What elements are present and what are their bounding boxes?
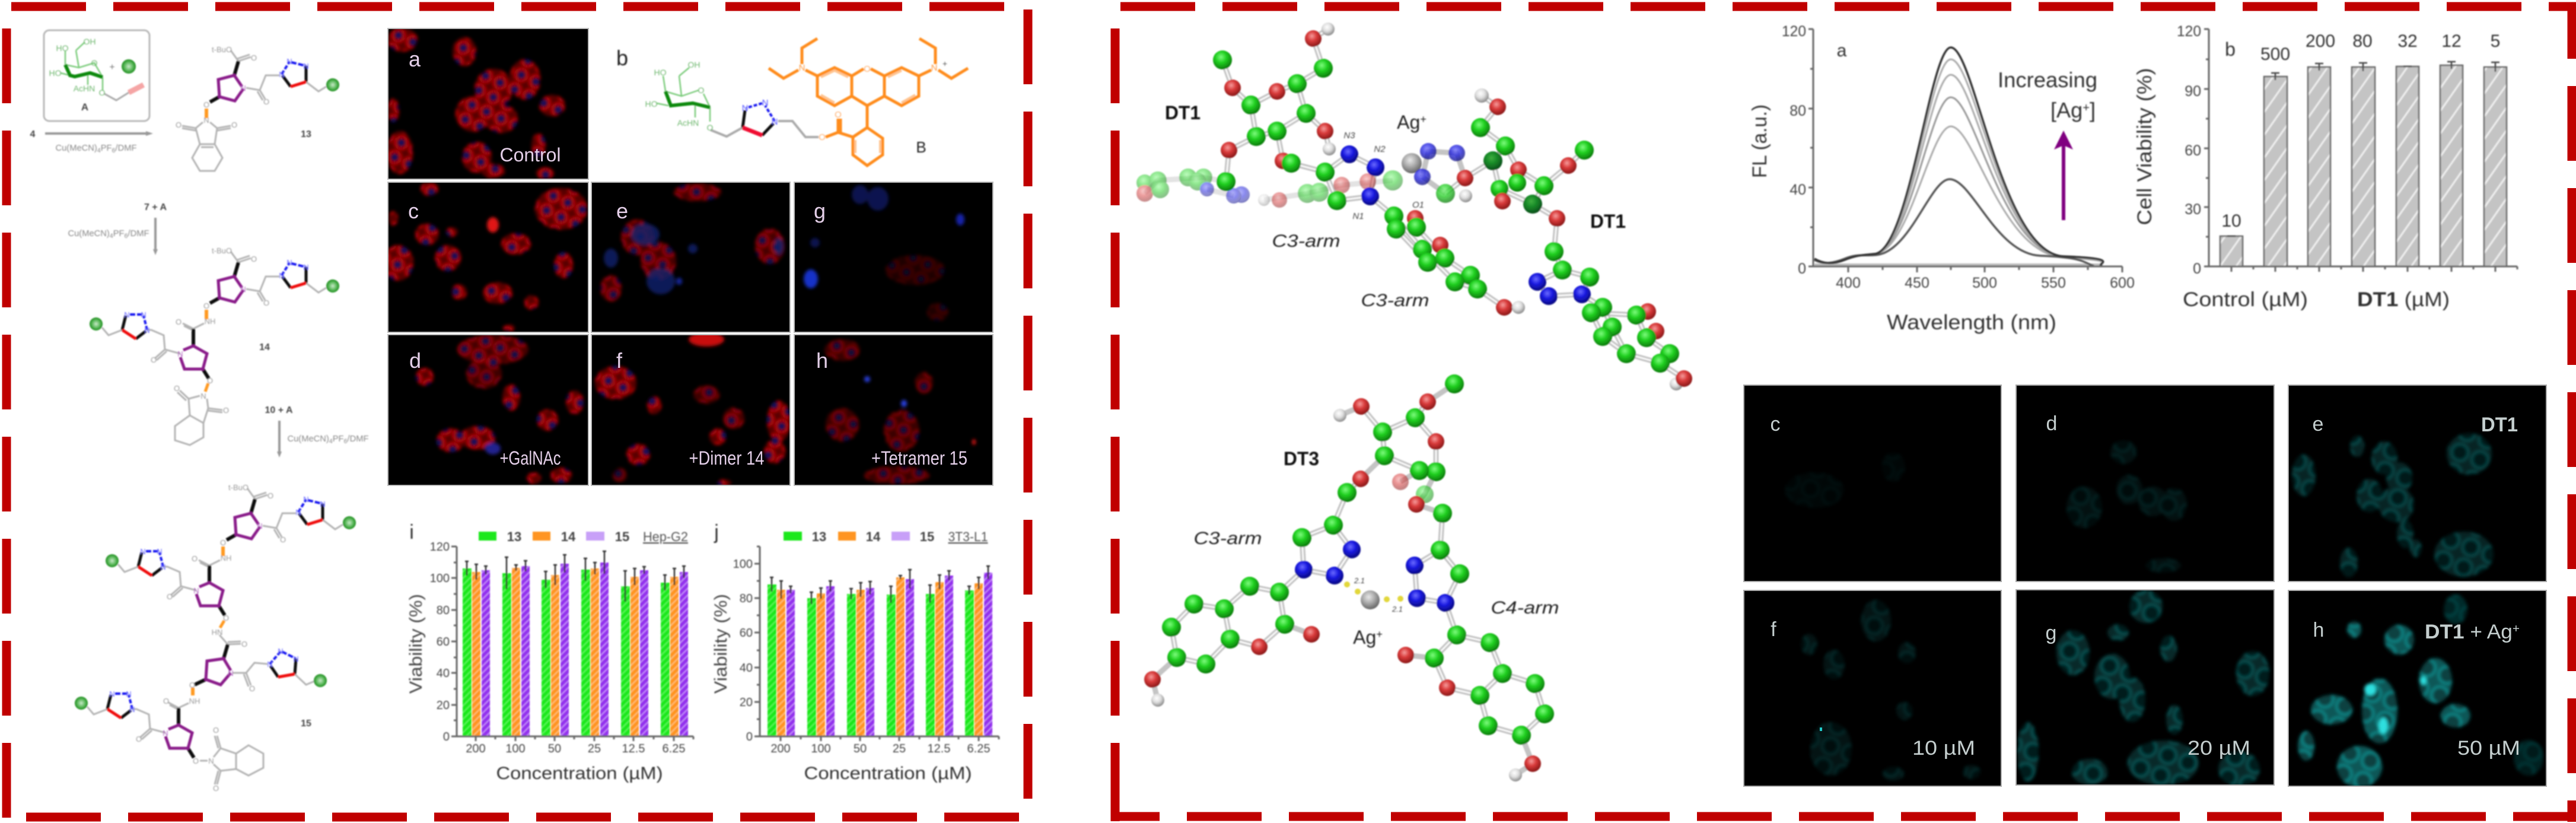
- molecular model: DT1 dimer with Ag+: Ag: [1397, 112, 1420, 133]
- bar chart i: Hep-G2 viability: 20: [437, 699, 450, 712]
- panel b: conjugate structure: N: [762, 98, 768, 108]
- bar chart b: cell viability: 200: [2306, 31, 2335, 51]
- line chart a: fluorescence spectra: 500: [1972, 275, 1997, 291]
- compound 15: N: [193, 586, 199, 595]
- reaction arrow to 14: 4: [110, 233, 113, 240]
- panel c: micrograph: [383, 182, 588, 332]
- panel d: +GalNAc micrograph: d: [409, 348, 421, 373]
- panel b: conjugate structure: OH: [688, 60, 700, 69]
- reaction arrow to 14: PF: [113, 228, 125, 239]
- panel f: DT1 + Ag+ 10 µM image: f: [1771, 618, 1776, 641]
- molecular model: DT3 with Ag+: +: [1376, 628, 1383, 640]
- reaction arrow to 13: 4: [30, 129, 36, 139]
- panel e: DT1 image: e: [2313, 413, 2323, 436]
- bar chart b: cell viability: DT1 (µM): [2357, 288, 2450, 311]
- compound 15: NH: [221, 554, 231, 563]
- panel a: control micrograph: a: [409, 47, 421, 71]
- bar chart j: 3T3-L1 viability: 12.5: [928, 742, 950, 755]
- panel d: +GalNAc micrograph: +GalNAc: [499, 447, 561, 469]
- panel h: +Tetramer 15 micrograph: h: [816, 348, 828, 373]
- panel e: micrograph: [591, 182, 790, 332]
- molecular model: DT3 with Ag+: DT3: [1284, 448, 1319, 469]
- bar chart i: Hep-G2 viability: 100: [505, 742, 526, 755]
- spectra curves: [1814, 47, 2103, 266]
- building block A box: HO: [49, 68, 62, 78]
- compound 15: HN: [212, 628, 222, 637]
- reaction arrow to 15: [265, 405, 369, 457]
- compound 14: N: [303, 263, 309, 272]
- building block A box: [44, 30, 149, 121]
- panel a: control micrograph: Control: [499, 144, 561, 166]
- chart j label and legend: [714, 521, 988, 544]
- bar chart b: cell viability: 120: [2177, 23, 2201, 40]
- compound 15: N: [320, 500, 326, 509]
- compound 14: N: [124, 310, 130, 319]
- molecular model: DT3 with Ag+: 2.1: [1354, 576, 1365, 585]
- bar chart j: 3T3-L1 viability: 50: [854, 742, 867, 755]
- bar chart i: Hep-G2 viability: Viability (%): [406, 594, 426, 694]
- molecular model: DT1 dimer with Ag+: DT1: [1165, 102, 1201, 123]
- panel b: conjugate structure: N: [772, 117, 778, 127]
- reaction arrow to 14: Cu(MeCN): [68, 228, 110, 239]
- bar chart j: 3T3-L1 viability: Viability (%): [711, 594, 731, 694]
- compound 14: O: [251, 255, 257, 263]
- compound 14: N: [144, 326, 150, 335]
- bar chart i: Hep-G2 viability: 80: [437, 604, 450, 617]
- compound 15: N: [208, 757, 214, 765]
- chart i label and legend: 14: [561, 529, 576, 544]
- panel h: +Tetramer 15 micrograph: +Tetramer 15: [871, 447, 967, 469]
- reaction arrow to 14: /DMF: [128, 228, 149, 239]
- compound 14: t-BuO: [212, 246, 232, 255]
- line chart a: fluorescence spectra: [Ag: [2050, 98, 2083, 122]
- compound 15: O: [192, 554, 198, 563]
- panel g: DT1 + Ag+ 20 µM image: 20 µM: [2187, 737, 2250, 760]
- panel b: conjugate structure: N: [742, 103, 748, 113]
- panel h: +Tetramer 15 micrograph: [794, 335, 993, 485]
- chart i label and legend: Hep-G2: [643, 529, 688, 544]
- compound 15: N: [160, 563, 166, 571]
- building block A box: OH: [83, 37, 96, 46]
- bar chart i: Hep-G2 viability: 6.25: [663, 742, 685, 755]
- bar chart b: cell viability: 30: [2185, 201, 2201, 218]
- bar chart j: 3T3-L1 viability: 100: [733, 558, 753, 571]
- bar chart i: Hep-G2 viability: 100: [430, 572, 450, 585]
- line chart a: fluorescence spectra: Increasing: [1998, 68, 2097, 92]
- compound 15: O: [213, 784, 219, 793]
- molecular model: DT1 dimer with Ag+: C3-arm: [1272, 231, 1340, 251]
- bar chart j: 3T3-L1 viability: Concentration (µM): [804, 764, 972, 783]
- molecular model: DT1 dimer with Ag+: N3: [1343, 131, 1355, 141]
- compound 13: N: [240, 84, 246, 93]
- panel b: conjugate structure: +: [942, 59, 947, 68]
- compound 14: O: [151, 355, 157, 364]
- arrow: increasing Ag+: [2054, 131, 2073, 220]
- compound 15: N: [109, 689, 115, 698]
- reaction arrow to 15: PF: [333, 434, 344, 444]
- reaction arrow to 15: Cu(MeCN): [287, 434, 330, 444]
- compound 13: N: [279, 70, 285, 79]
- bar chart j: 3T3-L1 viability: 200: [770, 742, 791, 755]
- chart j label and legend: 14: [866, 529, 881, 544]
- compound 14: [90, 246, 339, 445]
- reaction arrow to 13: 6: [112, 147, 116, 154]
- compound 15: O: [163, 697, 169, 706]
- panel f: +Dimer 14 micrograph: [591, 332, 791, 487]
- molecular model: DT3 with Ag+: 2.1: [1392, 605, 1403, 614]
- panel b: conjugate structure: N: [931, 63, 937, 73]
- bar chart i: Hep-G2 viability: 25: [588, 742, 601, 755]
- compound 15: N: [157, 547, 163, 556]
- panel b: conjugate structure: B: [916, 138, 926, 156]
- compound 15: N: [278, 647, 284, 656]
- bar chart j: 3T3-L1 viability: 40: [740, 662, 753, 675]
- panel f: DT1 + Ag+ 10 µM image: [1744, 590, 2001, 786]
- panel b: conjugate structure: N: [799, 63, 805, 73]
- compound 14: O: [203, 301, 209, 310]
- molecular model: DT1 dimer with Ag+: DT1: [1590, 211, 1626, 232]
- panel b: conjugate structure: HO: [654, 68, 667, 77]
- bar chart j: 3T3-L1 viability: 60: [740, 627, 753, 640]
- molecular model: DT1 dimer with Ag+: +: [1420, 113, 1426, 125]
- compound 15: N: [163, 729, 168, 738]
- compound 13: O: [231, 120, 237, 129]
- panel b: conjugate structure: O: [819, 132, 826, 142]
- compound 15: O: [167, 592, 173, 601]
- bar chart i: Hep-G2 viability: 12.5: [622, 742, 645, 755]
- panel b: conjugate structure: O: [707, 123, 714, 132]
- compound 15: O: [189, 681, 195, 689]
- chart j label and legend: 3T3-L1: [948, 529, 988, 544]
- compound 14: N: [177, 349, 183, 358]
- chart i label and legend: 15: [615, 529, 629, 544]
- compound 15: O: [249, 684, 255, 693]
- line chart a: fluorescence spectra: 600: [2110, 275, 2135, 291]
- panel e: micrograph: e: [616, 199, 628, 223]
- molecular model: DT3 with Ag+: C3-arm: [1193, 529, 1262, 548]
- line chart a: fluorescence spectra: 40: [1789, 182, 1806, 198]
- molecular model: DT3 with Ag+: [1144, 374, 1559, 781]
- panel h: DT1 + Ag+ 50 µM image: DT1 + Ag: [2425, 621, 2511, 643]
- chart i label and legend: i: [409, 521, 414, 544]
- panel a: control micrograph: [387, 28, 588, 179]
- bar chart b: cell viability: 500: [2260, 45, 2290, 64]
- molecular model: DT1 dimer with Ag+: N1: [1352, 211, 1364, 221]
- compound 14: N: [141, 310, 147, 319]
- reaction arrow to 13: 4: [97, 147, 101, 154]
- reaction arrow to 13: /DMF: [116, 143, 136, 153]
- bar chart b: cell viability: b: [2225, 39, 2236, 60]
- line chart a: fluorescence spectra: 120: [1782, 23, 1806, 40]
- bar chart j: 3T3-L1 viability: 0: [746, 730, 753, 743]
- panel g: micrograph: [794, 182, 993, 332]
- panel g: micrograph: g: [814, 199, 826, 223]
- bar chart i: Hep-G2 viability: 200: [466, 742, 486, 755]
- compound 14: N: [200, 392, 206, 401]
- line chart a: fluorescence spectra: 550: [2041, 275, 2066, 291]
- bar chart j: 3T3-L1 viability: 25: [893, 742, 906, 755]
- chart j label and legend: 15: [920, 529, 934, 544]
- compound 15: N: [295, 508, 301, 517]
- panel b: conjugate structure: [616, 39, 968, 166]
- bar chart b: cell viability: 60: [2185, 142, 2201, 159]
- panel f: DT1 + Ag+ 10 µM image: 10 µM: [1912, 737, 1975, 760]
- compound 13: N: [303, 62, 309, 71]
- bar chart i: Hep-G2 viability: 50: [548, 742, 561, 755]
- line chart a: fluorescence spectra: a: [1837, 41, 1847, 61]
- compound 14: O: [176, 317, 182, 326]
- panel b: conjugate structure: AcHN: [677, 118, 699, 128]
- bar chart b: cell viability: 80: [2352, 31, 2373, 51]
- compound 15: O: [223, 614, 229, 622]
- bar chart i: Hep-G2 viability: 60: [437, 635, 450, 649]
- panel h: DT1 + Ag+ 50 µM image: +: [2513, 622, 2520, 635]
- reaction arrow to 15: 6: [344, 438, 348, 445]
- compound 13: N: [203, 116, 209, 125]
- compound 15: NH: [189, 697, 200, 706]
- reaction arrow to 15: 4: [329, 438, 333, 445]
- bar chart j: 3T3-L1 viability: 100: [811, 742, 831, 755]
- panel h: DT1 + Ag+ 50 µM image: 50 µM: [2457, 737, 2520, 760]
- line chart a: fluorescence spectra: Wavelength (nm): [1887, 311, 2056, 334]
- bar chart j: 3T3-L1 viability: 20: [740, 696, 753, 709]
- panel b: conjugate structure: HO: [645, 99, 658, 109]
- line chart a: fluorescence spectra: FL (a.u.): [1749, 104, 1771, 178]
- building block A box: +: [109, 62, 115, 72]
- bar chart i: Hep-G2 viability: 40: [437, 667, 450, 680]
- compound 15: O: [213, 726, 219, 735]
- line chart a: fluorescence spectra: 450: [1905, 275, 1929, 291]
- building block A box: AcHN: [74, 84, 95, 93]
- bar chart i: Hep-G2 viability: 0: [443, 730, 450, 743]
- reaction arrow to 13: Cu(MeCN): [56, 143, 98, 153]
- compound 15: N: [267, 660, 273, 669]
- panel b: conjugate structure: O: [835, 110, 842, 120]
- compound 14: N: [240, 285, 246, 294]
- reaction arrow to 13: PF: [101, 143, 112, 153]
- compound 13: 13: [301, 129, 311, 139]
- compound 15: N: [140, 547, 146, 556]
- chart j label and legend: j: [714, 521, 719, 544]
- compound 15: O: [193, 757, 199, 765]
- compound 15: N: [129, 705, 135, 714]
- compound 15: O: [241, 640, 247, 649]
- compound 14: 14: [259, 342, 270, 352]
- molecular model: DT3 with Ag+: C4-arm: [1491, 598, 1559, 618]
- compound 13: N: [286, 57, 292, 66]
- bar chart b: cell viability: 10: [2221, 211, 2241, 231]
- bar chart b: cell viability: 90: [2185, 83, 2201, 100]
- right panel dashed frame: [1111, 2, 2576, 822]
- compound 13: O: [251, 53, 257, 62]
- line chart a: fluorescence spectra: 80: [1789, 103, 1806, 119]
- compound 13: O: [176, 120, 182, 129]
- compound 14: O: [174, 384, 180, 393]
- panel e: DT1 image: [2288, 385, 2546, 581]
- bar chart b: cell viability: 12: [2441, 31, 2462, 51]
- panel g: DT1 + Ag+ 20 µM image: g: [2046, 622, 2056, 644]
- building block A box: O: [99, 88, 106, 97]
- line chart a: fluorescence spectra: 0: [1798, 260, 1806, 277]
- reaction arrow to 15: /DMF: [348, 434, 369, 444]
- molecular model: DT1 dimer with Ag+: C3-arm: [1361, 291, 1429, 310]
- panel f: +Dimer 14 micrograph: f: [616, 348, 623, 373]
- bar chart i: Hep-G2 viability: 120: [430, 541, 450, 554]
- bar chart i: Hep-G2 viability: Concentration (µM): [496, 764, 663, 783]
- reaction arrow to 13: [30, 129, 153, 154]
- panel h: DT1 + Ag+ 50 µM image: [2288, 590, 2546, 787]
- chart i label and legend: [409, 521, 688, 544]
- line chart a: fluorescence spectra: 400: [1836, 275, 1861, 291]
- chart i label and legend: 13: [507, 529, 521, 544]
- compound 15: N: [126, 689, 132, 698]
- compound 13: O: [203, 100, 209, 109]
- panel b: conjugate structure: O: [698, 85, 705, 95]
- compound 15: N: [293, 654, 299, 663]
- compound 15: N: [303, 495, 309, 504]
- compound 15: O: [268, 491, 273, 500]
- molecular model: DT1 dimer with Ag+: N2: [1374, 144, 1386, 154]
- line chart a: fluorescence spectra: +: [2083, 101, 2090, 115]
- left panel dashed frame: [7, 7, 1028, 818]
- compound 14: N: [279, 271, 285, 280]
- molecular model: DT1 dimer with Ag+: O1: [1412, 200, 1424, 210]
- panel d: DT1 image: [2016, 385, 2274, 581]
- panel f: +Dimer 14 micrograph: +Dimer 14: [689, 447, 764, 469]
- compound 15: [75, 483, 356, 793]
- silver coordination bonds: [1344, 581, 1403, 602]
- reaction arrow to 14: 7 + A: [144, 202, 167, 212]
- panel g: DT1 + Ag+ 20 µM image: [2016, 590, 2274, 787]
- bar chart j: 3T3-L1 viability: 6.25: [967, 742, 990, 755]
- building block A box: A: [81, 101, 88, 113]
- compound 15: N: [228, 669, 234, 678]
- compound 14: O: [207, 376, 213, 385]
- reaction arrow to 14: 6: [125, 233, 128, 240]
- compound 15: 15: [301, 719, 311, 729]
- panel b: conjugate structure: O: [864, 64, 871, 74]
- bar chart b: cell viability: 0: [2193, 260, 2201, 277]
- bar chart b: cell viability: [2134, 23, 2517, 311]
- chart j label and legend: 13: [812, 529, 826, 544]
- panel c: micrograph: c: [408, 199, 419, 223]
- compound 15: N: [257, 522, 263, 530]
- compound 15: O: [136, 735, 142, 743]
- bar chart b: cell viability: Cell Viability (%): [2134, 68, 2156, 225]
- line chart a: fluorescence spectra: [1749, 23, 2135, 334]
- line chart a: fluorescence spectra: ]: [2090, 98, 2096, 122]
- compound 15: t-BuO: [228, 483, 249, 492]
- compound 14: O: [223, 406, 229, 415]
- compound 15: O: [280, 535, 286, 544]
- panel d: DT1 image: d: [2046, 412, 2057, 435]
- building block A box: HO: [56, 43, 69, 53]
- molecular model: DT1 dimer with Ag+: [1136, 23, 1692, 390]
- panel h: DT1 + Ag+ 50 µM image: h: [2313, 619, 2324, 641]
- reaction arrow to 14: [68, 202, 167, 255]
- bar chart j: 3T3-L1 viability: [711, 521, 999, 783]
- compound 13: t-BuO: [212, 45, 232, 54]
- panel e: DT1 image: DT1: [2481, 414, 2518, 436]
- compound 14: N: [286, 258, 292, 267]
- bar chart b: cell viability: 32: [2397, 31, 2418, 51]
- compound 13: [176, 45, 339, 171]
- molecular model: DT3 with Ag+: Ag: [1353, 627, 1376, 648]
- bar chart b: cell viability: 5: [2491, 31, 2500, 51]
- reaction arrow to 15: 10 + A: [265, 405, 293, 415]
- compound 14: NH: [205, 317, 215, 326]
- panel c: DT1 image: [1744, 385, 2001, 581]
- bar chart b: cell viability: Control (µM): [2183, 288, 2308, 311]
- building block A box: O: [91, 58, 98, 68]
- panel: synthesis scheme: [30, 30, 369, 793]
- compound 13: O: [263, 97, 269, 106]
- bar chart i: Hep-G2 viability: [406, 521, 693, 783]
- panel b: conjugate structure: b: [616, 46, 628, 70]
- bar chart j: 3T3-L1 viability: 80: [740, 592, 753, 605]
- panel c: DT1 image: c: [1770, 413, 1781, 436]
- compound 15: O: [220, 538, 226, 547]
- panel d: +GalNAc micrograph: [388, 335, 588, 485]
- compound 14: O: [263, 298, 269, 307]
